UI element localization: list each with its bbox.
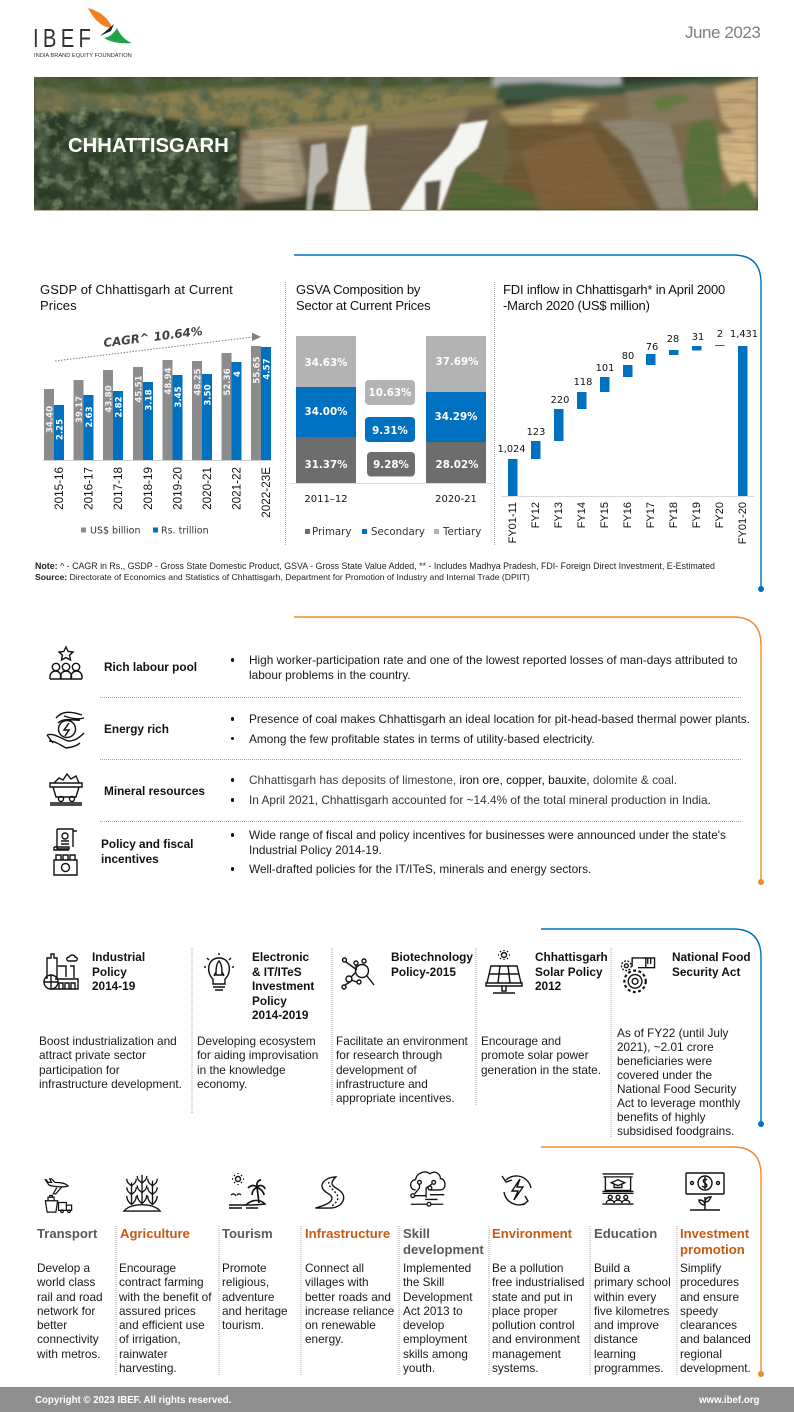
sector: infrastructure — [305, 1165, 397, 1377]
body text: beneficiaries were — [617, 1054, 712, 1068]
body text: assured prices — [119, 1304, 196, 1318]
body text: villages with — [305, 1275, 369, 1289]
bar chart: GSDP: 2022-23E — [260, 467, 273, 518]
body text — [680, 1261, 751, 1375]
body text: Developing ecosystem — [197, 1034, 316, 1048]
heading: Solar Policy — [535, 964, 603, 978]
heading: GSDP: Prices — [40, 298, 77, 313]
waterfall chart: FDI: FY01-11 — [507, 502, 519, 543]
body text: distance — [594, 1332, 638, 1346]
body text: systems. — [492, 1361, 539, 1375]
chart note and source — [35, 561, 715, 582]
body text: development. — [680, 1361, 751, 1375]
heading — [391, 950, 473, 978]
icon: rocket bulb — [204, 953, 234, 991]
waterfall chart: FDI: 31 — [692, 332, 704, 343]
bar chart: GSDP: 43.80 — [104, 385, 114, 413]
policy: industrial — [39, 950, 182, 1091]
icon: factory — [43, 953, 79, 990]
logo: IBEF — [33, 8, 132, 59]
bullet text: Among the few profitable states in terms of utility-based electricity. — [249, 732, 595, 746]
banner title: CHHATTISGARH — [68, 135, 229, 157]
body text: harvesting. — [119, 1361, 177, 1375]
heading: Investment — [252, 979, 314, 993]
body text: Connect all — [305, 1261, 364, 1275]
waterfall chart: FDI: 220 — [551, 395, 569, 406]
sector: agriculture — [119, 1165, 219, 1377]
body text: appropriate incentives. — [336, 1091, 455, 1105]
stacked bar chart: GSVA: 34.29% — [435, 411, 477, 423]
heading — [680, 1226, 749, 1258]
sector: environment — [492, 1165, 587, 1377]
bar chart: GSDP: 2.63 — [85, 406, 95, 428]
photo: waterfall — [34, 77, 758, 211]
panel: advantages — [46, 646, 750, 876]
body text: better roads and — [305, 1290, 391, 1304]
body text — [119, 1261, 211, 1375]
heading: GSVA: GSVA Composition by — [296, 282, 420, 297]
heading: Skill — [403, 1226, 430, 1241]
sector: tourism — [222, 1165, 300, 1377]
bar chart: GSDP: Rs. trillion — [161, 526, 209, 536]
icon: cloud circuit — [408, 1169, 448, 1209]
body text: within every — [594, 1290, 656, 1304]
heading: Education — [594, 1226, 657, 1241]
heading — [252, 950, 314, 1022]
heading: Transport — [37, 1226, 97, 1241]
waterfall chart: FDI: FY14 — [576, 502, 588, 528]
body text: Act to leverage monthly — [617, 1096, 740, 1110]
body text: connectivity — [37, 1332, 99, 1346]
stacked bar chart: GSVA: 34.00% — [305, 406, 347, 418]
body text: Promote — [222, 1261, 267, 1275]
body text: pollution control — [492, 1318, 575, 1332]
heading: National Food — [672, 950, 751, 964]
policy: solar — [481, 950, 608, 1076]
icon: bird logo — [88, 8, 132, 44]
body text: economy. — [197, 1077, 247, 1091]
sector: skill development — [403, 1165, 489, 1377]
body text: and balanced — [680, 1332, 751, 1346]
waterfall chart: FDI: 28 — [667, 334, 679, 345]
stacked bar chart: GSVA: 37.69% — [436, 356, 478, 368]
body text: promote solar power — [481, 1048, 589, 1062]
body text: covered under the — [617, 1068, 712, 1082]
body text: benefits of highly — [617, 1110, 706, 1124]
body text: subsidised foodgrains. — [617, 1124, 734, 1138]
waterfall chart: FDI: FY17 — [645, 502, 657, 528]
body text: and heritage — [222, 1304, 288, 1318]
body text — [305, 1261, 394, 1346]
waterfall chart: FDI: 80 — [622, 351, 634, 362]
stacked bar chart: GSVA: 28.02% — [436, 459, 478, 471]
body text: for aiding improvisation — [197, 1048, 318, 1062]
body text: Facilitate an environment — [336, 1034, 468, 1048]
body text — [492, 1261, 584, 1375]
waterfall chart: FDI: 123 — [527, 427, 545, 438]
body text: energy. — [305, 1332, 343, 1346]
body text: As of FY22 (until July — [617, 1026, 728, 1040]
body text — [403, 1261, 473, 1375]
body text: develop — [403, 1318, 444, 1332]
heading — [92, 950, 145, 993]
waterfall chart: FDI: FY15 — [599, 502, 611, 528]
bar chart: GSDP: 48.94 — [164, 367, 174, 395]
body text: and ensure — [680, 1290, 739, 1304]
heading: Tourism — [222, 1226, 273, 1241]
body text: increase reliance — [305, 1304, 394, 1318]
logo wordmark: IBEF — [33, 23, 95, 53]
heading: GSDP: GSDP of Chhattisgarh at Current — [40, 282, 233, 297]
body text: for research through — [336, 1048, 442, 1062]
body text: Act 2013 to — [403, 1304, 463, 1318]
heading: 2014-19 — [92, 979, 135, 993]
bar chart: GSDP: 2020-21 — [201, 467, 214, 510]
central ledge and rock — [236, 104, 520, 211]
bar chart: GSDP: 55.65 — [252, 356, 262, 384]
icon: mine cart — [49, 772, 83, 806]
waterfall chart: FDI: FY12 — [530, 502, 542, 528]
bullet text: labour problems in the country. — [249, 668, 411, 682]
heading: 2012 — [535, 979, 561, 993]
body text: primary school — [594, 1275, 671, 1289]
icon: money plant — [685, 1172, 725, 1212]
bar chart: GSDP: 2017-18 — [112, 467, 125, 510]
heading: Chhattisgarh — [535, 950, 608, 964]
body text: management — [492, 1346, 561, 1360]
panel: FDI chart — [497, 282, 758, 544]
icon: people and star — [49, 646, 83, 680]
heading — [672, 950, 751, 979]
chart note and source: Note: ^ - CAGR in Rs., GSDP - Gross State Domestic Product, GSVA - Gross State Value Added, ** - Includes Madhya Pradesh, FDI- Foreign Direct Investment, E-Estimated — [35, 561, 715, 571]
body text: and improve — [594, 1318, 659, 1332]
copyright: Copyright © 2023 IBEF. All rights reserved. — [35, 1395, 231, 1406]
body text: rail and road — [37, 1290, 103, 1304]
bullet text — [249, 653, 738, 682]
heading: Environment — [492, 1226, 572, 1241]
big cliff — [490, 78, 758, 211]
stacked bar chart: GSVA: Primary — [312, 527, 351, 538]
body text: religious, — [222, 1275, 269, 1289]
heading: Security Act — [672, 964, 740, 978]
body text: infrastructure and — [336, 1077, 428, 1091]
waterfall chart: FDI: FY20 — [714, 502, 726, 528]
body text: of irrigation, — [119, 1332, 181, 1346]
icon: document and money — [53, 828, 78, 876]
body text: Simplify — [680, 1261, 721, 1275]
body text: adventure — [222, 1290, 274, 1304]
sector: transport — [30, 1165, 115, 1377]
stacked bar chart: GSVA: 34.63% — [305, 357, 347, 369]
bar chart: GSDP: 3.50 — [204, 384, 214, 406]
stacked bar chart: GSVA: 2020-21 — [435, 494, 477, 505]
label: incentives — [101, 852, 159, 866]
row: rich labour pool — [49, 646, 738, 682]
body text: speedy — [680, 1304, 718, 1318]
sector: education — [594, 1165, 674, 1377]
icon: crops — [122, 1173, 162, 1213]
bullet text: Chhattisgarh has deposits of limestone, iron ore, copper, bauxite, dolomite & coal. — [249, 773, 677, 787]
heading: FDI: FDI inflow in Chhattisgarh* in April 2000 — [503, 282, 725, 297]
left forest — [34, 110, 240, 211]
icon: molecule magnifier — [341, 957, 374, 990]
bar chart: GSDP: 34.40 — [46, 406, 56, 433]
heading: Industrial — [92, 950, 145, 964]
bar chart: GSDP: 2.82 — [114, 396, 124, 418]
bar chart: GSDP: CAGR^ 10.64% — [103, 324, 203, 350]
body text: procedures — [680, 1275, 739, 1289]
icon: solar panel — [485, 950, 523, 994]
body text — [617, 1026, 740, 1138]
body text: place proper — [492, 1304, 558, 1318]
stacked bar chart: GSVA: Tertiary — [442, 527, 481, 538]
body text: world class — [37, 1275, 95, 1289]
panel: GSDP chart — [40, 282, 273, 536]
heading: Electronic — [252, 950, 309, 964]
label: Mineral resources — [104, 784, 205, 798]
body text: Implemented — [403, 1261, 471, 1275]
body text: tourism. — [222, 1318, 264, 1332]
bullet text: High worker-participation rate and one of the lowest reported losses of man-days attributed to — [249, 653, 738, 667]
body text — [222, 1261, 288, 1332]
waterfall chart: FDI: FY13 — [553, 502, 565, 528]
body text: network for — [37, 1304, 95, 1318]
body text: with the benefit of — [119, 1290, 211, 1304]
heading: Biotechnology — [391, 950, 473, 964]
waterfall chart: FDI: FY01-20 — [737, 502, 749, 544]
heading: development — [403, 1242, 484, 1257]
heading: Policy-2015 — [391, 964, 456, 978]
heading: Policy — [252, 994, 287, 1008]
body text — [37, 1261, 103, 1361]
bullet text: In April 2021, Chhattisgarh accounted for ~14.4% of the total mineral production in India. — [249, 793, 711, 807]
body text — [336, 1034, 468, 1105]
heading — [403, 1226, 484, 1258]
icon: road — [314, 1176, 346, 1209]
panel: policies — [39, 950, 751, 1138]
bullet text — [249, 828, 726, 857]
body text: Encourage and — [481, 1034, 561, 1048]
policy: food security — [617, 950, 751, 1138]
body text: and environment — [492, 1332, 580, 1346]
body text: clearances — [680, 1318, 737, 1332]
waterfall chart: FDI: FY18 — [668, 502, 680, 528]
body text: youth. — [403, 1361, 435, 1375]
rock strata — [240, 78, 758, 211]
body text: Develop a — [37, 1261, 90, 1275]
heading: Policy — [92, 964, 127, 978]
row: mineral resources — [49, 772, 711, 807]
bar chart: GSDP: 48.25 — [194, 368, 204, 396]
body text: better — [37, 1318, 67, 1332]
waterfall chart: FDI: 1,024 — [497, 444, 526, 455]
body text: development of — [336, 1062, 417, 1076]
body text: National Food Security — [617, 1082, 736, 1096]
body text: Be a pollution — [492, 1261, 564, 1275]
body text — [481, 1034, 601, 1076]
date: June 2023 — [685, 23, 760, 42]
body text: generation in the state. — [481, 1062, 601, 1076]
bar chart: GSDP: 4.57 — [262, 358, 272, 380]
heading: & IT/ITeS — [252, 964, 302, 978]
body text: free industrialised — [492, 1275, 584, 1289]
panel: GSVA chart — [290, 282, 492, 538]
icon: plane ship truck — [41, 1178, 76, 1213]
bar chart: GSDP: 2018-19 — [142, 467, 155, 510]
bar chart: GSDP: US$ billion — [90, 526, 140, 536]
hero banner — [34, 77, 758, 211]
bullet text: Presence of coal makes Chhattisgarh an ideal location for pit-head-based thermal power plants. — [249, 712, 750, 726]
bar chart: GSDP: 2016-17 — [82, 467, 96, 510]
body text — [594, 1261, 671, 1375]
chart note and source: Source: Directorate of Economics and Statistics of Chhattisgarh, Department for Promotion of Industry and Internal Trade (DPIIT) — [35, 572, 530, 582]
icon: gears and boxes — [620, 957, 656, 994]
bullet text: Industrial Policy 2014-19. — [249, 843, 382, 857]
bullet text: Wide range of fiscal and policy incentives for businesses were announced under the state's — [249, 828, 726, 842]
body text: participation for — [39, 1062, 120, 1076]
bar chart: GSDP: 2021-22 — [230, 467, 244, 510]
heading: FDI — [503, 282, 725, 313]
bullet text: Well-drafted policies for the IT/ITeS, minerals and energy sectors. — [249, 862, 591, 876]
body text: with metros. — [37, 1346, 101, 1360]
body text: programmes. — [594, 1361, 664, 1375]
body text: Encourage — [119, 1261, 176, 1275]
body text: Boost industrialization and — [39, 1034, 177, 1048]
body text: attract private sector — [39, 1048, 146, 1062]
stacked bar chart: GSVA: 31.37% — [305, 459, 347, 471]
logo tagline: INDIA BRAND EQUITY FOUNDATION — [34, 53, 132, 59]
sky and distant trees — [492, 74, 622, 86]
body text — [197, 1034, 318, 1091]
body text: infrastructure development. — [39, 1077, 182, 1091]
stacked bar chart: GSVA: 9.28% — [373, 459, 409, 471]
body text: Build a — [594, 1261, 630, 1275]
row: policy and fiscal incentives — [53, 828, 726, 876]
body text — [39, 1034, 182, 1091]
body text: contract farming — [119, 1275, 204, 1289]
bar chart: GSDP: 2019-20 — [172, 467, 184, 510]
waterfall chart: FDI: 118 — [574, 377, 592, 388]
website: www.ibef.org — [699, 1395, 759, 1406]
bar chart: GSDP: 52.36 — [223, 368, 233, 396]
label: Policy and fiscal — [101, 837, 193, 851]
footer bar — [0, 1387, 794, 1412]
policy: electronic and IT — [197, 950, 318, 1091]
bar chart: GSDP: 3.18 — [144, 389, 154, 411]
heading: GSVA — [296, 282, 430, 313]
hillside — [34, 77, 504, 127]
body text: employment — [403, 1332, 467, 1346]
body text: five kilometres — [594, 1304, 669, 1318]
stacked bar chart: GSVA: 10.63% — [369, 387, 411, 399]
body text: in the knowledge — [197, 1062, 286, 1076]
waterfall chart: FDI: 2 — [717, 329, 723, 340]
bar chart: GSDP: 2015-16 — [53, 467, 66, 510]
panel: vision sectors — [30, 1165, 760, 1380]
icon: energy cycle — [501, 1173, 533, 1207]
bar chart: GSDP: 45.51 — [134, 375, 144, 403]
heading: Infrastructure — [305, 1226, 390, 1241]
stacked bar chart: GSVA: 2011–12 — [304, 494, 348, 505]
bar chart: GSDP: 39.17 — [75, 396, 85, 423]
stacked bar chart: GSVA: Secondary — [371, 527, 425, 538]
body text: Development — [403, 1290, 473, 1304]
waterfall chart: FDI: FY16 — [622, 502, 634, 528]
label — [101, 837, 193, 866]
waterfall chart: FDI: 1,431 — [730, 329, 758, 340]
icon: hands and energy — [46, 712, 84, 749]
waterfall chart: FDI: 101 — [596, 363, 614, 374]
body text: on renewable — [305, 1318, 376, 1332]
heading: promotion — [680, 1242, 745, 1257]
heading: Investment — [680, 1226, 749, 1241]
heading — [535, 950, 608, 993]
stacked bar chart: GSVA: 9.31% — [372, 425, 408, 437]
body text: learning — [594, 1346, 636, 1360]
heading: Agriculture — [120, 1226, 190, 1241]
body text: skills among — [403, 1346, 468, 1360]
heading: GSDP — [40, 282, 233, 313]
bar chart: GSDP: 3.45 — [174, 386, 184, 408]
label: Rich labour pool — [104, 660, 197, 674]
bar chart: GSDP: 4 — [233, 371, 243, 377]
body text: rainwater — [119, 1346, 168, 1360]
bar chart: GSDP: 2.25 — [56, 419, 66, 440]
icon: island — [228, 1173, 266, 1211]
waterfall chart: FDI: FY19 — [691, 502, 703, 528]
body text: regional — [680, 1346, 722, 1360]
body text: the Skill — [403, 1275, 444, 1289]
foliage mottling — [34, 77, 495, 211]
body text: state and put in — [492, 1290, 573, 1304]
icon: classroom — [602, 1173, 634, 1206]
waterfall chart: FDI: 76 — [646, 342, 658, 353]
heading: GSVA: Sector at Current Prices — [296, 298, 430, 313]
row: energy rich — [46, 712, 750, 749]
label: Energy rich — [104, 722, 169, 736]
sector: investment promotion — [680, 1165, 760, 1377]
body text: 2021), ~2.01 crore — [617, 1040, 714, 1054]
policy: biotechnology — [336, 950, 473, 1105]
heading: 2014-2019 — [252, 1008, 308, 1022]
heading: FDI: -March 2020 (US$ million) — [503, 298, 650, 313]
body text: and efficient use — [119, 1318, 205, 1332]
